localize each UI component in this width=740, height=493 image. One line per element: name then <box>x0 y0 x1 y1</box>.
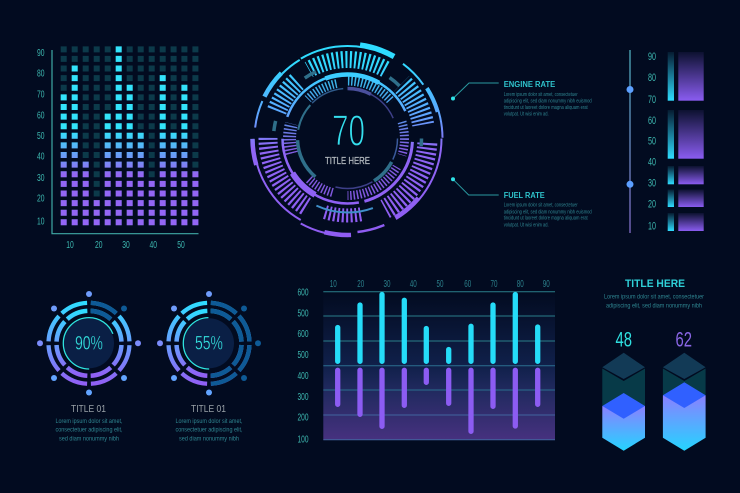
axis labels: vertical scale: 60 <box>37 110 45 121</box>
scale labels: 20 <box>648 198 656 210</box>
plot gradient area <box>323 292 555 440</box>
middle ring <box>282 74 412 204</box>
grid lines <box>323 292 555 440</box>
scale labels: 30 <box>648 178 656 190</box>
top scale labels: 80 <box>517 279 524 290</box>
orbit dots <box>157 291 261 396</box>
body text: adipiscing elit, sed diam nonummy nibh euismod <box>504 98 592 104</box>
value 48: 48 <box>616 328 632 352</box>
value: 90% <box>75 334 103 355</box>
left scale labels: 200 <box>298 412 309 424</box>
inner tick ring <box>290 82 404 196</box>
axis labels: vertical scale: 70 <box>37 90 45 101</box>
axis labels: horizontal scale: 50 <box>177 240 185 251</box>
teal level bars <box>668 52 674 231</box>
axis labels: horizontal scale <box>66 240 185 251</box>
panel: donut 90% <box>37 291 141 443</box>
callout: fuel rate <box>451 177 592 228</box>
outer segmented ring <box>250 42 444 236</box>
scale labels: 40 <box>648 156 656 168</box>
heading: ENGINE RATE <box>504 80 556 89</box>
scale labels: 80 <box>648 72 656 84</box>
body text: adipiscing elit, sed diam nonummy nibh euismod <box>504 209 592 215</box>
axis labels: horizontal scale: 40 <box>150 240 157 251</box>
axis labels: vertical scale: 50 <box>37 131 45 142</box>
panel: vertical level meter <box>626 50 704 233</box>
body text: volutpat. Ut wisi enim ad. <box>504 111 549 117</box>
unlit squares <box>64 46 195 225</box>
segmented rings <box>168 303 250 384</box>
heading: FUEL RATE <box>504 191 545 200</box>
scale labels: 10 <box>648 220 656 232</box>
axis labels: vertical scale: 20 <box>37 194 45 205</box>
connector line <box>451 177 499 195</box>
body text: consectetuer adipiscing elit, <box>56 428 123 434</box>
panel: donut 55% <box>157 291 261 443</box>
axis labels: vertical scale <box>37 48 45 227</box>
chart axes <box>52 50 198 234</box>
body text <box>604 295 704 309</box>
scale labels: 90 <box>648 51 656 63</box>
left scale labels: 400 <box>298 371 309 382</box>
body text: Lorem ipsum dolor sit amet, consectetuer <box>504 203 578 209</box>
axis labels: horizontal scale: 30 <box>122 240 130 251</box>
progress arc <box>183 318 235 369</box>
body text <box>504 92 592 117</box>
panel: dot matrix bar chart <box>37 46 199 251</box>
outer tick ring <box>268 60 426 218</box>
title: TITLE 01 <box>71 404 106 415</box>
top scale labels: 90 <box>543 279 550 290</box>
progress arc <box>63 318 115 369</box>
gauge title: TITLE HERE <box>325 156 370 167</box>
top scale labels <box>330 279 550 290</box>
lit squares <box>64 46 195 225</box>
top scale labels: 40 <box>410 279 417 290</box>
axis labels: vertical scale: 30 <box>37 173 45 184</box>
axis labels: horizontal scale: 10 <box>66 240 74 251</box>
left scale labels: 600 <box>298 288 309 298</box>
center disc <box>184 318 234 368</box>
scale labels: 50 <box>648 136 656 148</box>
panel: hexagon gauges <box>602 278 706 451</box>
purple level bars <box>678 52 704 231</box>
left scale labels: 300 <box>298 392 309 403</box>
heading: TITLE HERE <box>625 278 685 290</box>
segmented rings <box>48 303 130 384</box>
top scale labels: 70 <box>490 279 498 290</box>
body text: volutpat. Ut wisi enim ad. <box>504 222 549 228</box>
hexagon 48 <box>602 353 645 451</box>
body text: tincidunt ut laoreet dolore magna aliquam erat <box>504 105 588 111</box>
axis labels: vertical scale: 10 <box>37 216 45 227</box>
top scale labels: 30 <box>384 279 391 290</box>
left scale labels: 500 <box>298 308 309 320</box>
body text: Lorem ipsum dolor sit amet, <box>176 419 243 425</box>
body text: Lorem ipsum dolor sit amet, consectetuer <box>604 295 704 301</box>
left scale labels <box>298 288 309 446</box>
left scale labels: 500 <box>298 350 309 361</box>
body text <box>56 419 123 443</box>
body text <box>176 419 243 443</box>
cyan bars <box>338 294 538 361</box>
body text: sed diam nonummy nibh <box>59 437 119 443</box>
top scale labels: 20 <box>357 279 364 290</box>
scale labels: 70 <box>648 94 656 106</box>
axis labels: horizontal scale: 20 <box>95 240 103 251</box>
axis labels: vertical scale: 80 <box>37 68 45 80</box>
top scale labels: 10 <box>330 279 337 290</box>
top scale labels: 60 <box>464 279 471 290</box>
body text <box>504 203 592 228</box>
inner segmented ring <box>298 88 398 188</box>
value: 55% <box>195 334 223 355</box>
left scale labels: 600 <box>298 329 309 340</box>
panel: diverging bar chart <box>298 279 555 446</box>
dim accent ring pieces <box>274 64 422 212</box>
body text: Lorem ipsum dolor sit amet, <box>56 419 123 425</box>
body text: tincidunt ut laoreet dolore magna aliquam erat <box>504 216 588 222</box>
top scale labels: 50 <box>436 279 444 290</box>
callout: engine rate <box>451 80 592 117</box>
axis labels: vertical scale: 40 <box>37 152 45 163</box>
axis labels: vertical scale: 90 <box>37 48 45 59</box>
scale labels <box>648 51 656 232</box>
body text: Lorem ipsum dolor sit amet, consectetuer <box>504 92 578 98</box>
body text: sed diam nonummy nibh <box>179 437 239 443</box>
left scale labels: 100 <box>298 434 309 446</box>
gauge value: 70 <box>332 106 365 156</box>
title: TITLE 01 <box>191 404 226 415</box>
center disc <box>64 318 114 368</box>
body text: consectetuer adipiscing elit, <box>176 428 243 434</box>
slider track with handles <box>626 50 634 233</box>
panel: central radial gauge <box>250 42 444 236</box>
value 62: 62 <box>676 328 692 352</box>
scale labels: 60 <box>648 115 656 127</box>
purple bars <box>338 370 538 431</box>
body text: adipiscing elit, sed diam nonummy nibh <box>606 303 702 309</box>
hexagon 62 <box>663 353 706 451</box>
orbit dots <box>37 291 141 396</box>
connector line <box>451 83 499 100</box>
